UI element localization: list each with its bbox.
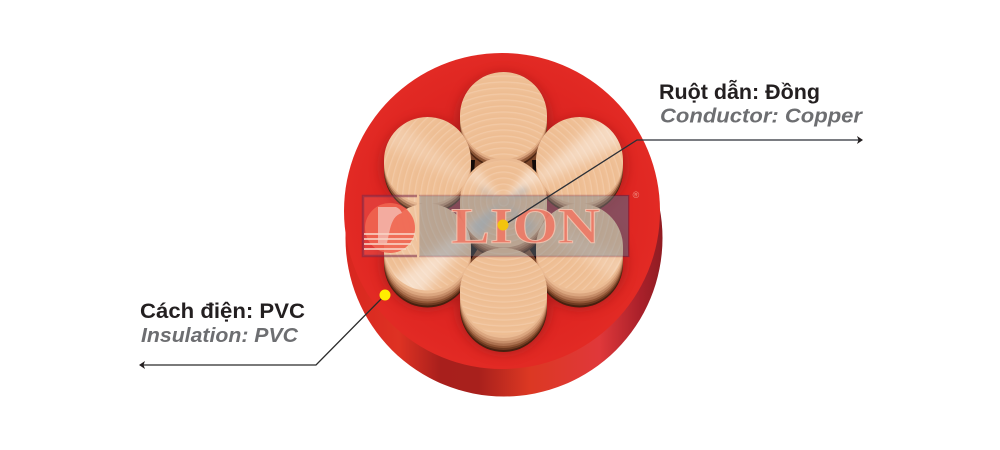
strand side walls [384,74,623,308]
conductor heading: Ruột dẫn: Đồng [659,80,820,104]
callout: insulation [139,290,390,369]
conductor: seven copper strands [384,72,623,352]
logo panel outline right [419,196,629,256]
insulation leader line [142,295,385,365]
logo panel left [363,196,417,256]
conductor subheading: Conductor: Copper [660,106,863,128]
strand shadows [382,74,626,353]
logo panel right [419,196,628,256]
arrow head left [139,361,145,369]
insulation heading: Cách điện: PVC [140,300,305,323]
registered mark: ® [633,190,640,200]
conductor marker dot [498,220,508,230]
strand faces [384,72,623,290]
bottom strand [460,248,547,352]
conductor leader line [504,140,860,225]
brown fill between strands [458,145,549,268]
logo emblem [364,203,415,253]
callout: conductor [498,80,863,230]
center strand streaks [468,168,538,238]
arrow head right [857,136,863,144]
logo panel outline left [363,196,417,256]
cable top face: red PVC insulation [344,53,660,369]
cable side wall [346,80,662,396]
watermark logo [363,190,640,256]
logo backing on red [419,195,629,257]
insulation marker dot [380,290,390,300]
dark gaps between strands [468,160,539,264]
insulation subheading: Insulation: PVC [141,325,299,347]
infographic: cable cross-section [139,53,863,396]
cable body [344,53,662,396]
logo wordmark: LION [451,199,600,255]
logo divider [417,196,420,256]
radial sheen on copper [386,120,622,290]
